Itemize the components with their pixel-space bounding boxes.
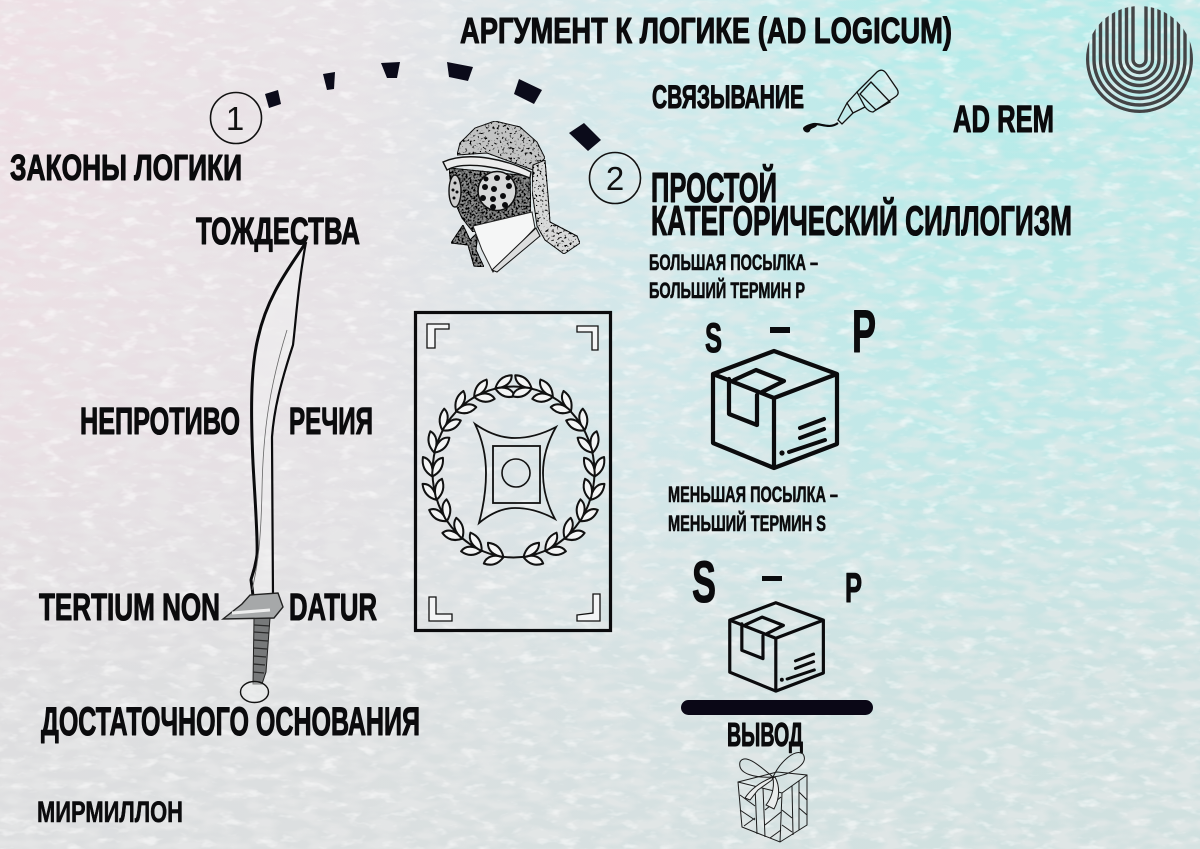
formula: S - P (major): P (852, 298, 876, 365)
icon: gladiator helmet (443, 121, 580, 272)
icon: gladiator shield with wreath (416, 312, 610, 630)
text: minor premise: МЕНЬШАЯ ПОСЫЛКА – (668, 482, 838, 507)
label: ad rem: AD REM (953, 99, 1054, 141)
heading: laws of logic: ЗАКОНЫ ЛОГИКИ (10, 147, 242, 188)
label: sufficient reason: ДОСТАТОЧНОГО ОСНОВАНИЯ (41, 700, 420, 744)
number 2 circle (590, 152, 640, 204)
label: non-contradiction left: НЕПРОТИВО (80, 401, 240, 443)
shield emblem (475, 424, 556, 523)
helmet dome (457, 121, 545, 170)
formula: S - P (minor): S (692, 550, 716, 615)
logo: concentric U (1088, 0, 1192, 112)
text: major premise: БОЛЬШАЯ ПОСЫЛКА – (649, 250, 818, 275)
helmet face plate (449, 168, 531, 232)
number 1 circle (210, 92, 262, 144)
helmet chin (473, 212, 535, 272)
icon: gift (738, 753, 807, 842)
helmet eye grille (478, 172, 516, 210)
heading: simple categorical syllogism (651, 163, 1072, 244)
label: datur: DATUR (289, 587, 377, 629)
number 1 circle: 1 (226, 100, 244, 137)
label: identity: ТОЖДЕСТВА (196, 211, 360, 253)
icon: box small (730, 603, 823, 691)
text: minor premise: МЕНЬШИЙ ТЕРМИН S (668, 511, 826, 536)
formula: S - P (minor): P (845, 564, 862, 611)
heading: simple categorical syllogism: ПРОСТОЙ (651, 163, 777, 211)
wreath (422, 375, 605, 568)
text: minor premise (668, 482, 838, 536)
title: АРГУМЕНТ К ЛОГИКЕ (AD LOGICUM) (460, 10, 952, 51)
label: conclusion: ВЫВОД (727, 716, 803, 753)
text: major premise (649, 250, 818, 303)
corner marks (427, 324, 600, 621)
formula: S - P (major): S (705, 314, 722, 361)
number 2 circle: 2 (606, 160, 624, 197)
label: non-contradiction right: РЕЧИЯ (289, 401, 373, 443)
text: major premise: БОЛЬШИЙ ТЕРМИН Р (649, 278, 805, 303)
label: tertium non: TERTIUM NON (39, 587, 220, 629)
label: binding: СВЯЗЫВАНИЕ (652, 79, 804, 115)
icon: box large (713, 351, 837, 468)
label: murmillo: МИРМИЛЛОН (37, 796, 183, 829)
formula: S - P (major) (705, 298, 876, 365)
conclusion bar (681, 700, 873, 715)
helmet back lower plates (451, 225, 484, 267)
helmet brim (443, 157, 531, 178)
icon: glue bottle (803, 70, 898, 132)
icon: sword (223, 242, 306, 702)
dashed arc arrow from 1 to 2 (265, 62, 601, 151)
helmet strap and neck guard (532, 160, 580, 254)
formula: S - P (minor) (692, 550, 862, 615)
